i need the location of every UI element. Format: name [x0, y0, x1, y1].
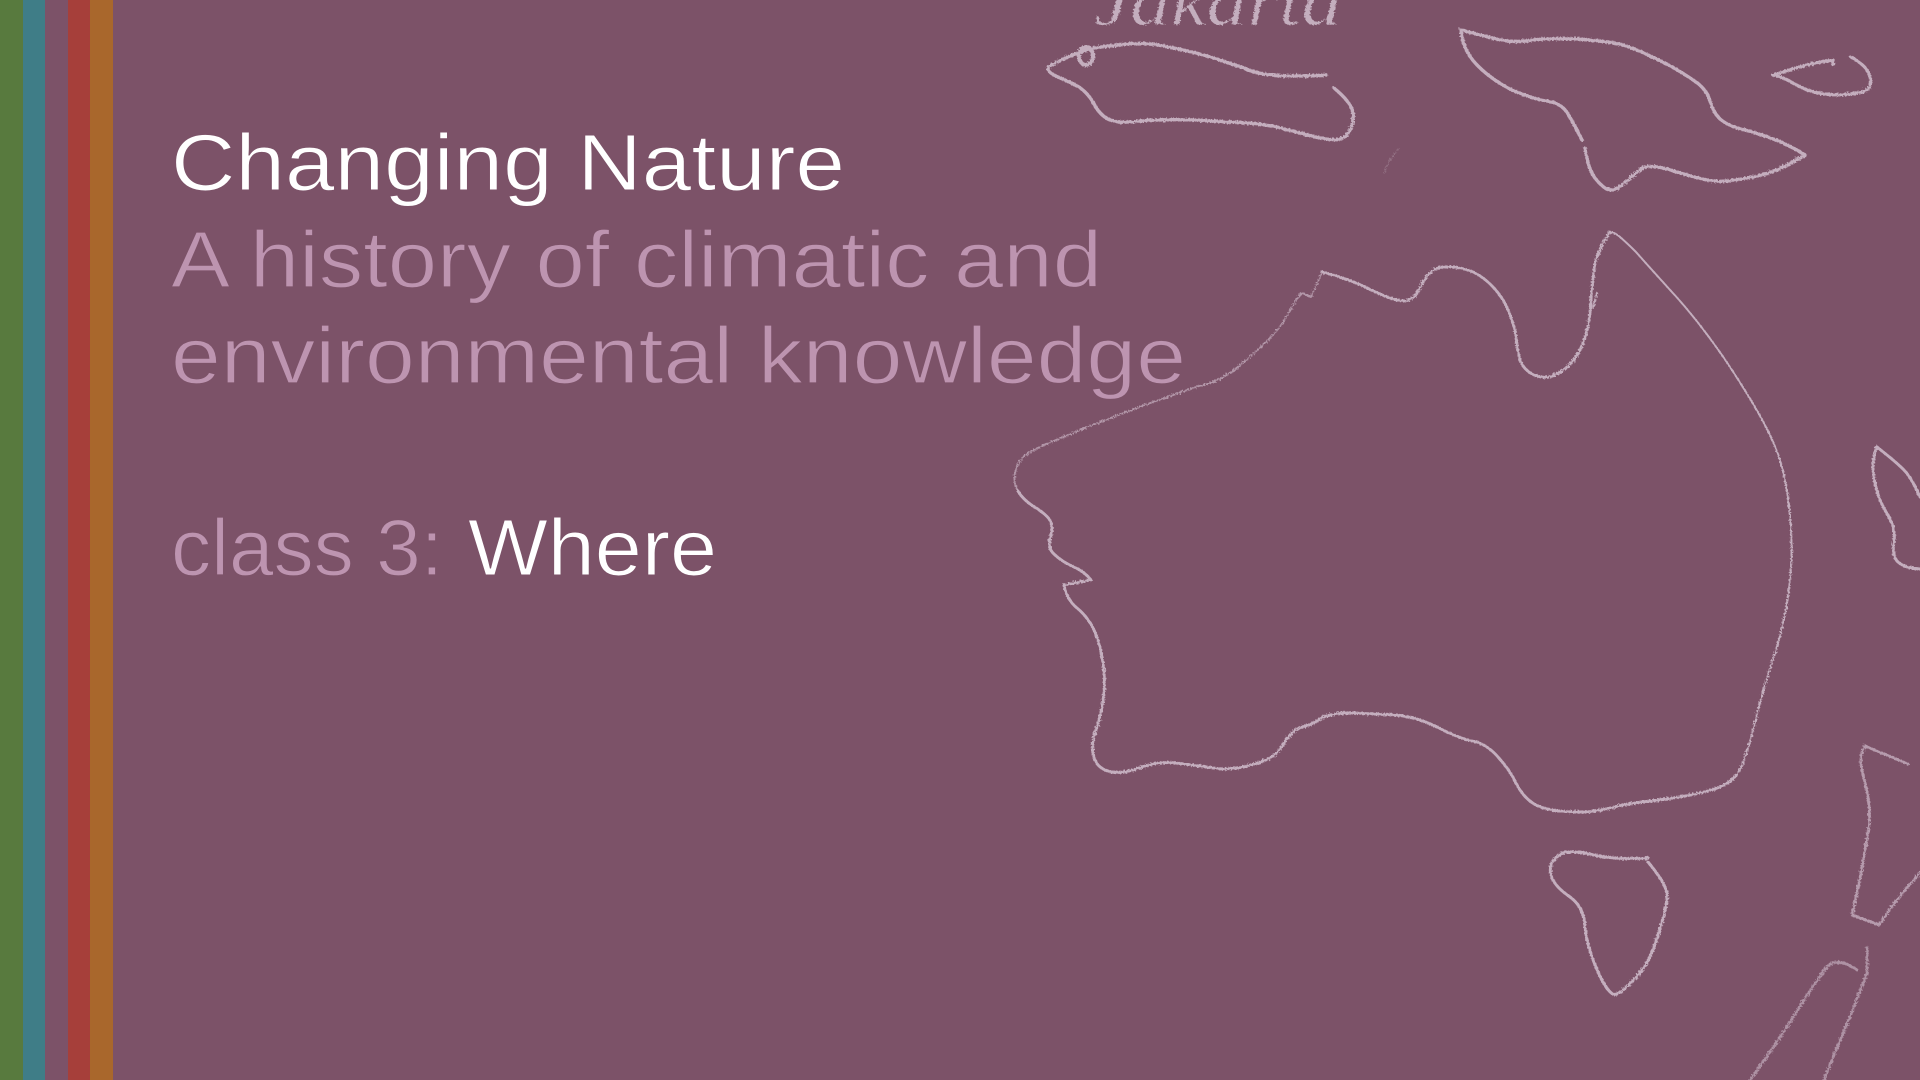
subtitle: A history of climatic and: [171, 215, 1102, 304]
Jakarta marker: [1079, 47, 1093, 65]
island: New Zealand north: [1852, 746, 1920, 925]
chalk map: [1014, 0, 1920, 1080]
class heading: [171, 503, 717, 592]
island: New Zealand south: [1750, 947, 1867, 1080]
island: small northeast: [1773, 57, 1871, 95]
continent: Australia: [1014, 232, 1792, 812]
island: east edge: [1873, 447, 1920, 569]
subtitle: [171, 215, 1186, 400]
class heading: class 3:: [171, 503, 443, 592]
title: Changing Nature: [171, 118, 845, 207]
class heading: Where: [468, 503, 717, 592]
colour stripes: [0, 0, 113, 1080]
island: Tasmania: [1550, 852, 1667, 995]
island: Java: [1048, 44, 1353, 140]
island: New Guinea: [1461, 30, 1805, 190]
stray chalk mark: [1384, 148, 1399, 173]
subtitle: environmental knowledge: [171, 311, 1186, 400]
